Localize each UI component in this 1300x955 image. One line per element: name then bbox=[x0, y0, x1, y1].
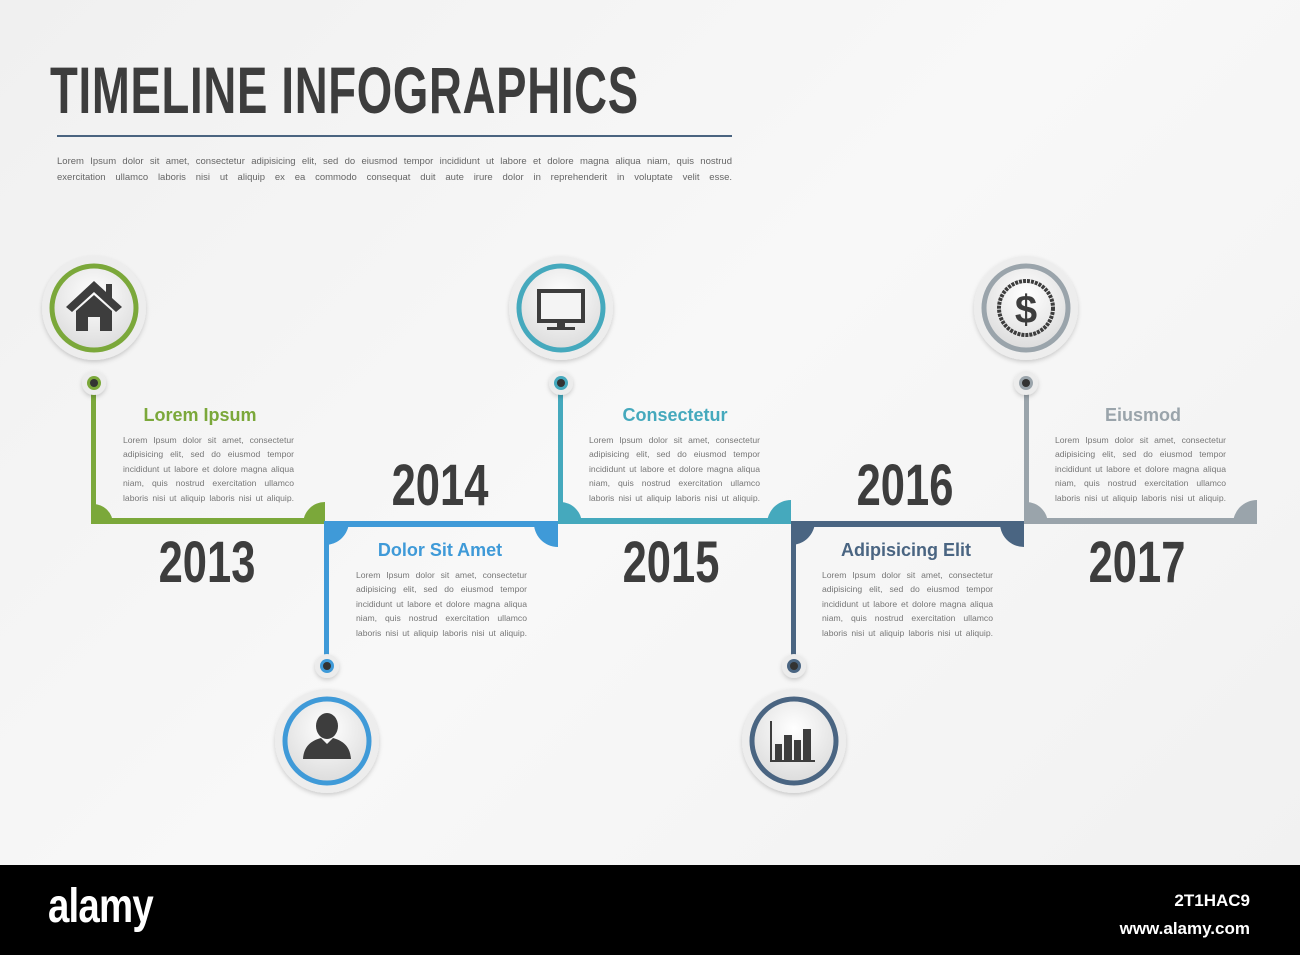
panel 2017 text: Lorem Ipsum dolor sit amet, consectetur adipisicing elit, sed do eiusmod tempor incididunt ut labore et dolore magna aliqua niam, quis nostrud exercitation ullamco laboris nisi ut aliquip laboris nisi ut aliquip. bbox=[1055, 435, 1226, 503]
icon: monitor bbox=[509, 256, 613, 360]
icon: home bbox=[42, 256, 146, 360]
year 2015: 2015 bbox=[623, 530, 719, 595]
dots bbox=[82, 371, 1038, 678]
panel 2017 text: Eiusmod bbox=[1105, 405, 1181, 425]
intro text bbox=[57, 156, 732, 183]
icon: dollar coin bbox=[974, 256, 1078, 360]
year 2017: 2017 bbox=[1089, 530, 1185, 595]
year 2016: 2016 bbox=[857, 453, 953, 518]
segment 2015 teal bbox=[558, 383, 791, 524]
panel 2013 text: Lorem Ipsum bbox=[143, 405, 257, 425]
panel 2015 text bbox=[589, 405, 760, 503]
footer bar bbox=[0, 865, 1300, 955]
panel 2016 text bbox=[822, 540, 993, 638]
year 2014: 2014 bbox=[392, 453, 488, 518]
intro text: exercitation ullamco laboris nisi ut aliquip ex ea commodo consequat duit aute irure dolor in reprehenderit in voluptate velit esse. bbox=[57, 172, 732, 183]
title underline bbox=[57, 135, 732, 137]
segment 2016 navy bbox=[791, 521, 1024, 667]
panel 2016 text: Lorem Ipsum dolor sit amet, consectetur adipisicing elit, sed do eiusmod tempor incididunt ut labore et dolore magna aliqua niam, quis nostrud exercitation ullamco laboris nisi ut aliquip laboris nisi ut aliquip. bbox=[822, 570, 993, 638]
panel 2015 text: Consectetur bbox=[622, 405, 728, 425]
panel 2013 text bbox=[123, 405, 294, 503]
footer id: 2T1HAC9 bbox=[1174, 891, 1250, 910]
segment 2014 blue bbox=[324, 521, 558, 667]
year 2013: 2013 bbox=[159, 530, 255, 595]
footer id: www.alamy.com bbox=[1120, 919, 1250, 938]
footer id bbox=[1120, 891, 1250, 938]
icon: person bbox=[275, 689, 379, 793]
panel 2013 text: Lorem Ipsum dolor sit amet, consectetur adipisicing elit, sed do eiusmod tempor incididunt ut labore et dolore magna aliqua niam, quis nostrud exercitation ullamco laboris nisi ut aliquip laboris nisi ut aliquip. bbox=[123, 435, 294, 503]
intro text: Lorem Ipsum dolor sit amet, consectetur adipisicing elit, sed do eiusmod tempor incididunt ut labore et dolore magna aliqua niam, quis nostrud bbox=[57, 156, 732, 167]
panel 2016 text: Adipisicing Elit bbox=[841, 540, 971, 560]
footer logo: alamy bbox=[48, 880, 153, 933]
panel 2014 text bbox=[356, 540, 527, 638]
icon: dollar coin: $ bbox=[1015, 288, 1037, 332]
panel 2015 text: Lorem Ipsum dolor sit amet, consectetur adipisicing elit, sed do eiusmod tempor incididunt ut labore et dolore magna aliqua niam, quis nostrud exercitation ullamco laboris nisi ut aliquip laboris nisi ut aliquip. bbox=[589, 435, 760, 503]
segment 2017 grey bbox=[1024, 383, 1257, 524]
icon: bar chart bbox=[742, 689, 846, 793]
panel 2017 text bbox=[1055, 405, 1226, 503]
segment 2013 green bbox=[91, 383, 325, 524]
panel 2014 text: Lorem Ipsum dolor sit amet, consectetur adipisicing elit, sed do eiusmod tempor incididunt ut labore et dolore magna aliqua niam, quis nostrud exercitation ullamco laboris nisi ut aliquip laboris nisi ut aliquip. bbox=[356, 570, 527, 638]
panel 2014 text: Dolor Sit Amet bbox=[378, 540, 502, 560]
title: TIMELINE INFOGRAPHICS bbox=[50, 53, 639, 127]
